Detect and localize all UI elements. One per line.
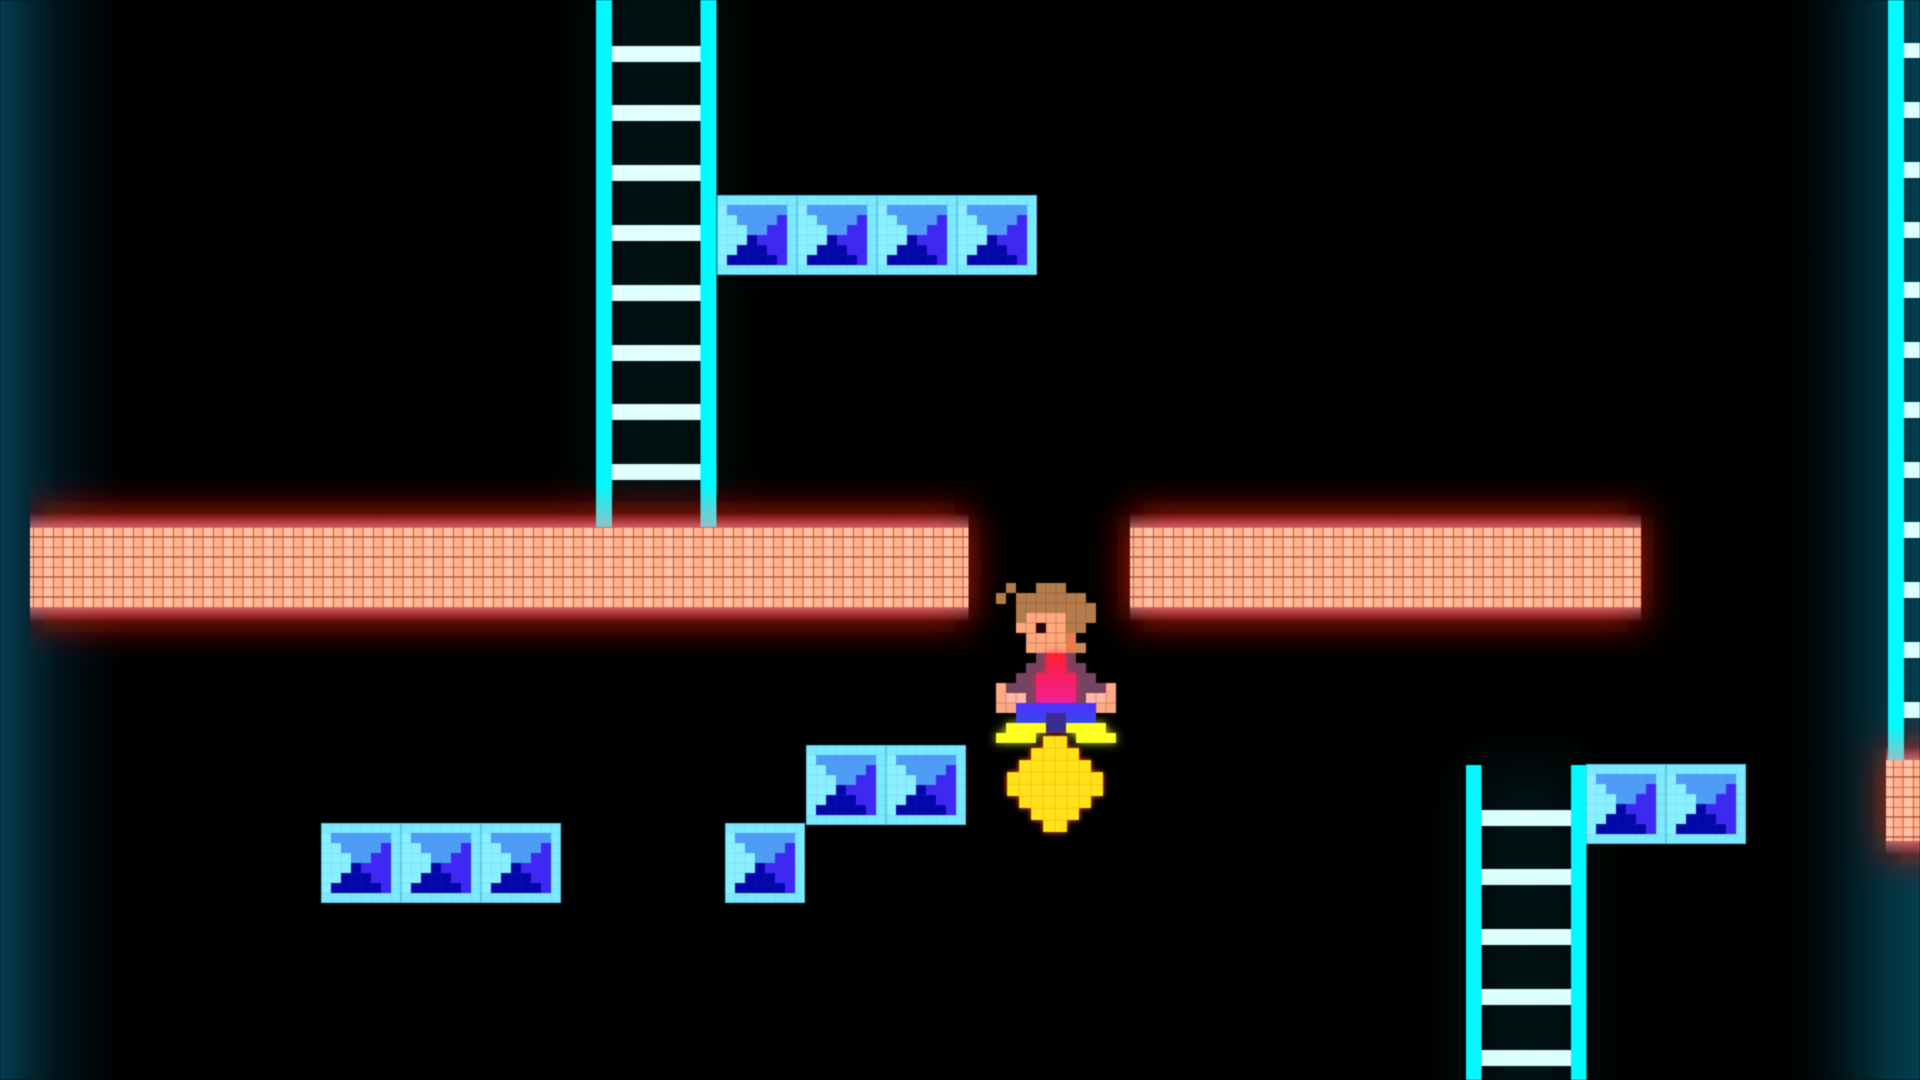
platform: left	[30, 527, 968, 608]
eye	[1036, 623, 1046, 633]
platform: far right fragment	[1886, 760, 1920, 841]
platform: right	[1130, 527, 1641, 608]
block row: top, four blocks	[717, 195, 1037, 275]
block row: lower left, three blocks	[321, 823, 561, 903]
pants	[1016, 703, 1096, 723]
neck shadow	[1066, 633, 1076, 653]
glow: ladders	[596, 0, 1586, 1080]
shirt glow	[1036, 653, 1076, 703]
glow: red platform halo	[30, 513, 1920, 855]
belt buckle	[1046, 713, 1066, 733]
block row: middle, two blocks	[806, 745, 966, 825]
glow: right edge	[1770, 0, 1920, 1080]
block: single step	[725, 823, 805, 903]
pixel lines	[996, 583, 1116, 713]
character	[996, 583, 1116, 743]
block row: lower right, two blocks	[1586, 764, 1746, 844]
shirt	[1036, 653, 1076, 703]
glow: left edge	[0, 0, 120, 1080]
face	[1016, 613, 1066, 653]
ladder: upper left	[596, 0, 716, 527]
shoes	[996, 723, 1116, 743]
icon: yellow diamond gem	[1007, 736, 1103, 832]
ladder: far right	[1888, 0, 1920, 760]
ladder: lower right	[1466, 765, 1586, 1080]
wrists	[1006, 693, 1106, 703]
hair	[996, 583, 1096, 643]
hands and arms	[996, 683, 1116, 713]
sleeves	[1006, 653, 1106, 703]
shoe glow	[996, 723, 1116, 743]
hair tail	[1076, 643, 1086, 653]
